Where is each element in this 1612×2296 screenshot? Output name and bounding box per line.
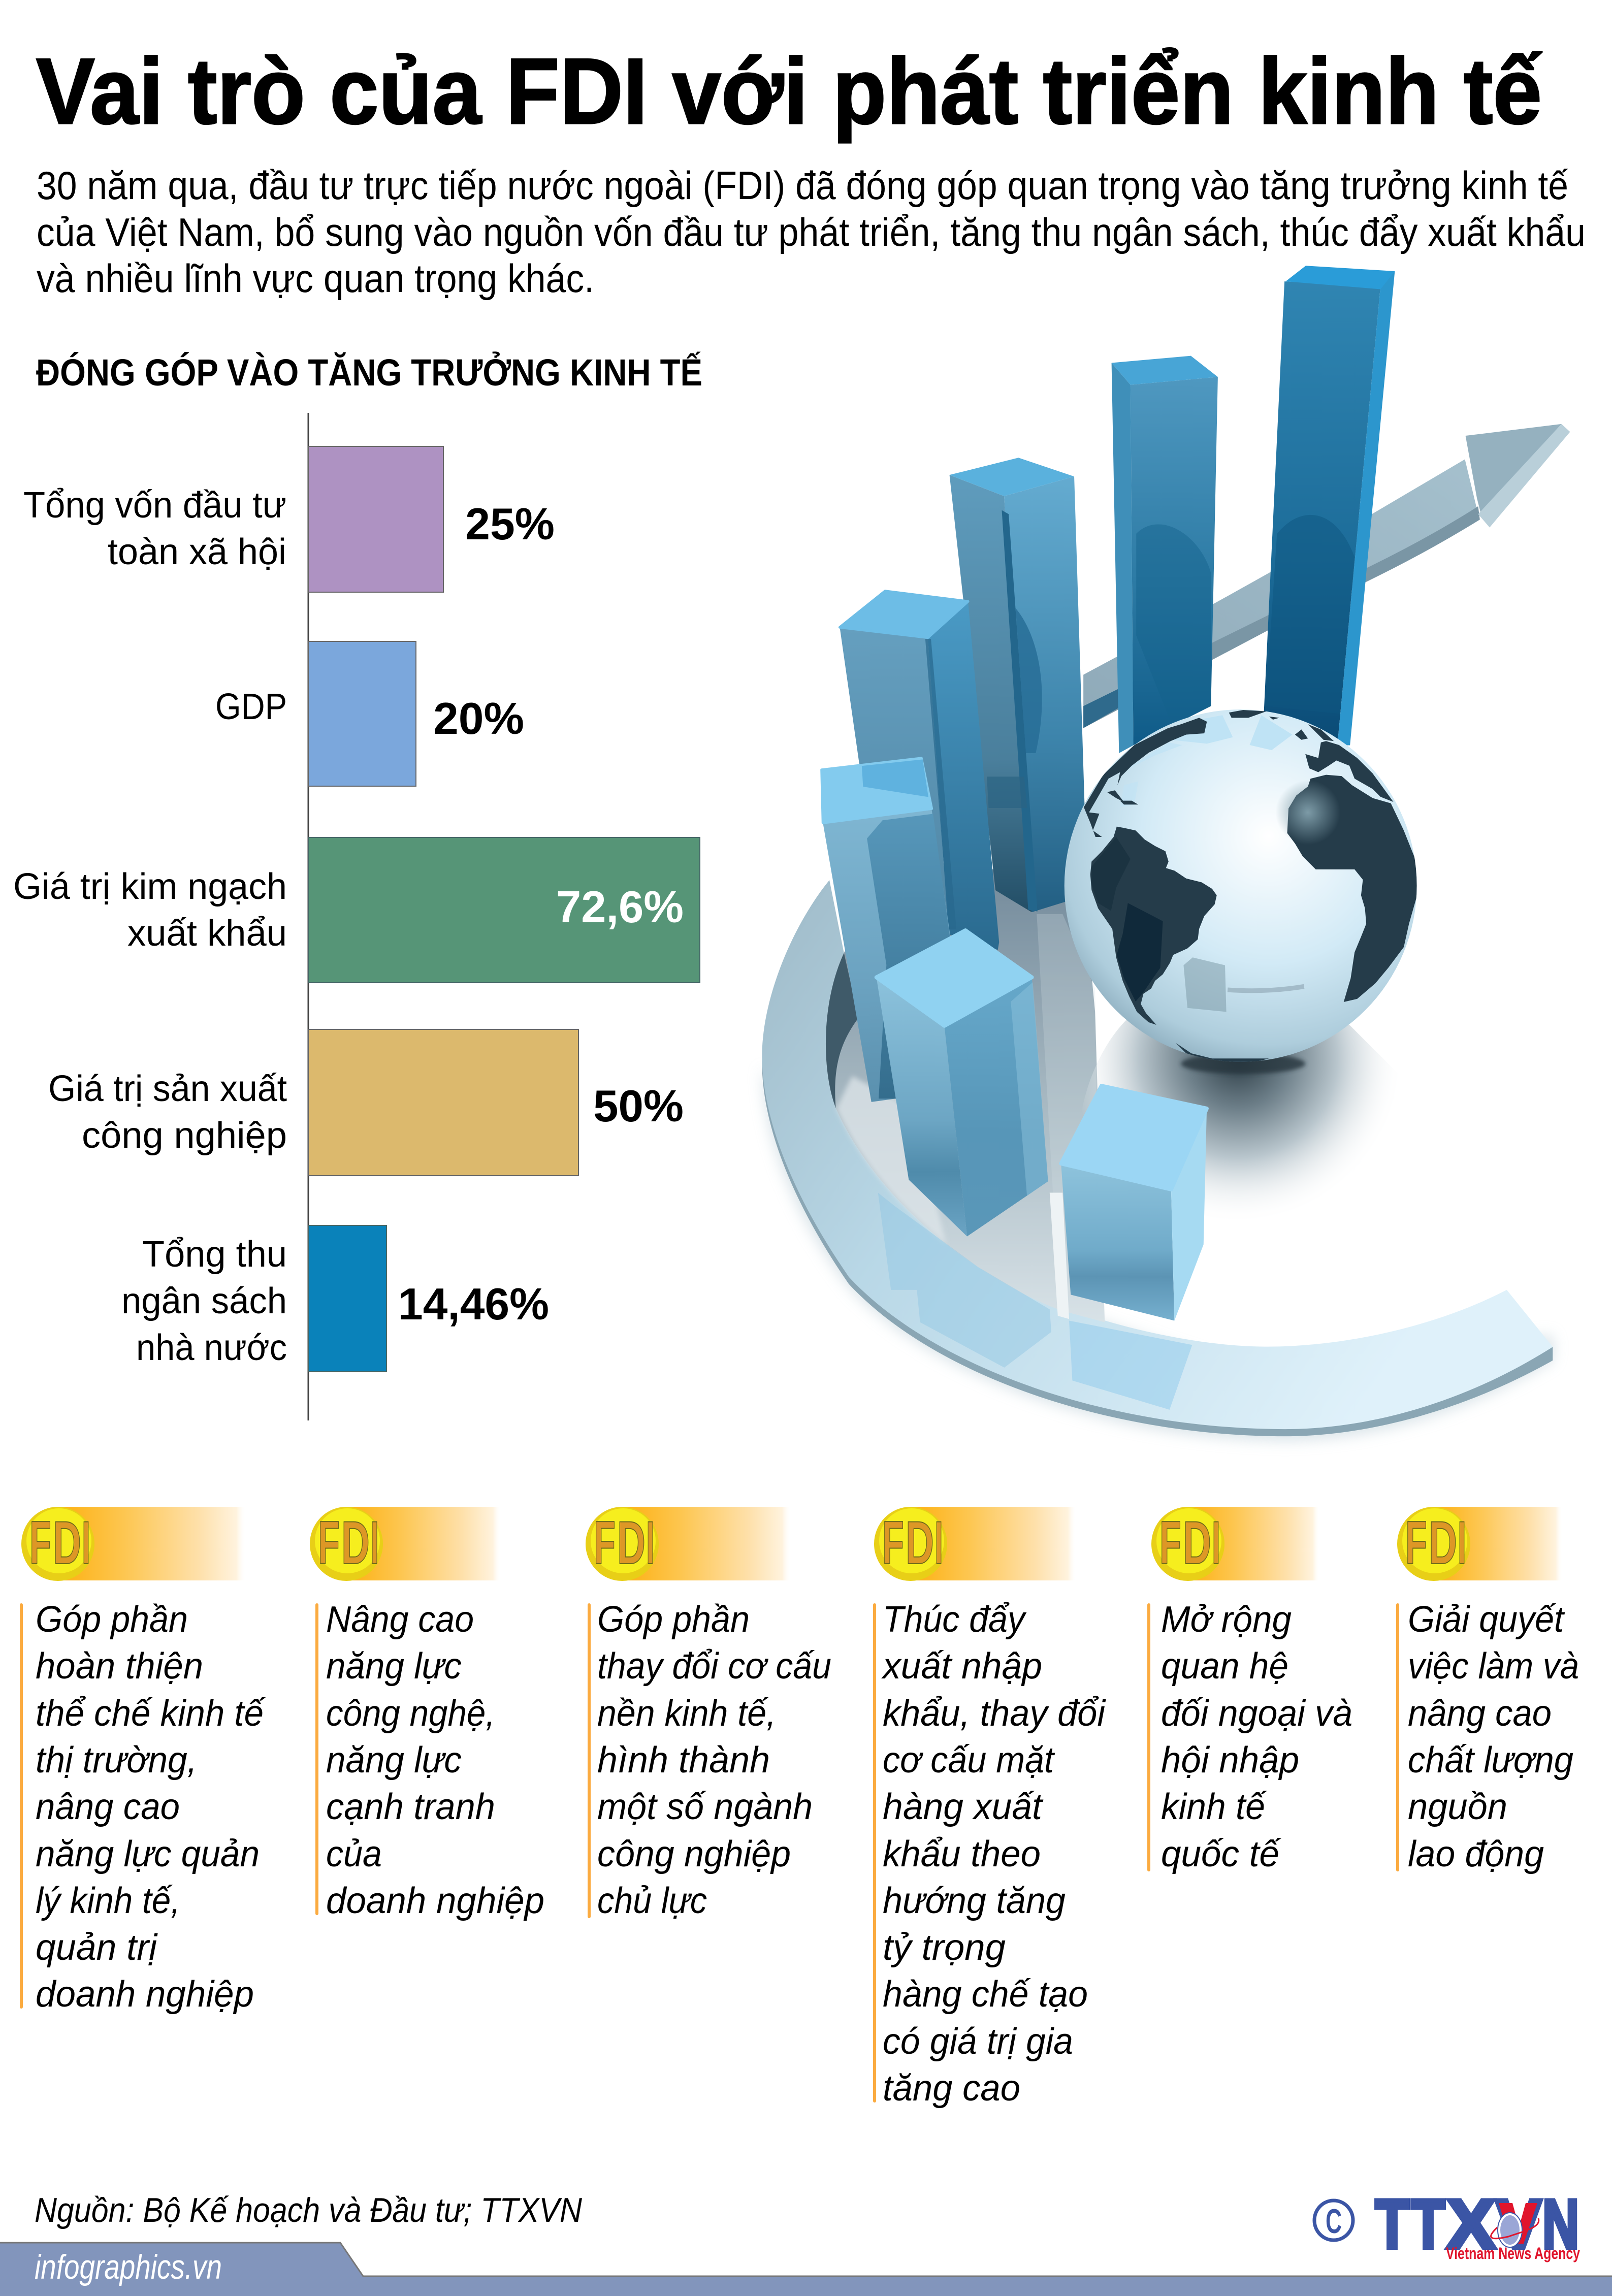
FDI column 3: hình thành: [597, 1740, 770, 1781]
bar: Tổng thu ngân sách nhà nước 14,46%: [121, 1225, 549, 1372]
logo: TTXVN: X: [1447, 2185, 1495, 2262]
bar: Tổng vốn đầu tư toàn xã hội 25%: [23, 446, 555, 592]
bar: Giá trị kim ngạch xuất khẩu 72,6%: 72,6%: [556, 882, 684, 932]
bar: Tổng thu ngân sách nhà nước 14,46%: ngân sách: [121, 1281, 287, 1321]
FDI column 2: công nghệ,: [326, 1693, 495, 1734]
bar: middle left: [840, 591, 999, 950]
FDI column 6: việc làm và: [1408, 1646, 1579, 1687]
FDI coin header: I: [1212, 1509, 1220, 1577]
logo: TTXVN: T: [1411, 2185, 1445, 2262]
FDI coin header: [874, 1507, 1076, 1581]
FDI column 1: thể chế kinh tế: [36, 1693, 266, 1734]
FDI coin header: I: [1458, 1509, 1466, 1577]
bar: Giá trị sản xuất công nghiệp 50%: [48, 1029, 684, 1176]
FDI column 6: lao động: [1408, 1834, 1544, 1874]
logo: copyright mark: C: [1326, 2202, 1342, 2241]
FDI coin header: F: [1405, 1509, 1427, 1577]
bar: Giá trị sản xuất công nghiệp 50%: công nghiệp: [82, 1115, 287, 1156]
FDI column 1: thị trường,: [36, 1740, 197, 1781]
FDI column 4: hàng chế tạo: [883, 1974, 1088, 2015]
logo: TTXVN: [1375, 2185, 1580, 2262]
FDI coin header: F: [1159, 1509, 1181, 1577]
FDI column 6: nguồn: [1408, 1787, 1507, 1827]
logo: copyright mark: [1314, 2201, 1353, 2241]
FDI coin header: D: [906, 1509, 934, 1577]
bar: Giá trị kim ngạch xuất khẩu 72,6%: [13, 837, 700, 983]
intro text block: [37, 163, 1586, 301]
logo: red V and globe: [1491, 2203, 1539, 2247]
FDI column 4: [873, 1507, 1106, 2109]
FDI coin header: [310, 1507, 501, 1581]
FDI coin header: I: [370, 1509, 379, 1577]
FDI column 2: cạnh tranh: [326, 1787, 495, 1827]
hero illustration: 3D bars and globe on a ring: [762, 266, 1570, 1440]
FDI column 5: hội nhập: [1161, 1740, 1299, 1781]
globe floor reflection and shadow: [1080, 1020, 1435, 1253]
arrow and tallest bars: [950, 266, 1570, 912]
bar: Tổng thu ngân sách nhà nước 14,46%: nhà nước: [136, 1328, 287, 1368]
FDI column 4: có giá trị gia: [883, 2021, 1073, 2062]
FDI column 3: chủ lực: [597, 1881, 707, 1921]
FDI coin header: [586, 1507, 791, 1581]
FDI coin header: [1151, 1507, 1319, 1581]
FDI column 3: một số ngành: [597, 1787, 813, 1827]
FDI column 4: tỷ trọng: [883, 1927, 1006, 1968]
FDI column 3: công nghiệp: [597, 1834, 791, 1874]
FDI column 1: năng lực quản: [36, 1834, 260, 1874]
bar: Tổng thu ngân sách nhà nước 14,46%: Tổng thu: [142, 1234, 287, 1275]
FDI column 2: năng lực: [326, 1646, 462, 1687]
FDI column 4: xuất nhập: [881, 1646, 1042, 1687]
FDI column 5: kinh tế: [1161, 1787, 1268, 1827]
FDI coin header: D: [53, 1509, 81, 1577]
FDI column 3: Góp phần: [597, 1599, 750, 1640]
FDI column 4: cơ cấu mặt: [883, 1740, 1055, 1781]
FDI column 5: đối ngoại và: [1161, 1693, 1352, 1734]
FDI coin header: F: [882, 1509, 904, 1577]
FDI column 3: nền kinh tế,: [597, 1693, 776, 1734]
bar: GDP 20%: 20%: [433, 693, 524, 743]
axis: [308, 413, 309, 1420]
bar: Tổng vốn đầu tư toàn xã hội 25%: 25%: [465, 499, 555, 549]
FDI coin header: [1397, 1507, 1562, 1581]
cube: front left: [877, 930, 1048, 1237]
FDI column 2: của: [326, 1834, 382, 1874]
bars: left group: [822, 591, 999, 1102]
bar: Tổng thu ngân sách nhà nước 14,46%: 14,46%: [398, 1279, 549, 1329]
bar: Tổng vốn đầu tư toàn xã hội 25%: toàn xã hội: [108, 532, 286, 572]
FDI coin header: I: [82, 1509, 90, 1577]
arrow: [1083, 424, 1570, 728]
FDI column 3: thay đổi cơ cấu: [597, 1646, 831, 1687]
FDI column 4: khẩu theo: [883, 1834, 1041, 1874]
FDI column 5: [1147, 1507, 1352, 1874]
bar chart: [13, 413, 700, 1420]
FDI coin header: D: [617, 1509, 646, 1577]
continents: [1084, 710, 1420, 1063]
FDI column 4: Thúc đẩy: [883, 1599, 1027, 1640]
intro text block: và nhiều lĩnh vực quan trọng khác.: [37, 256, 594, 301]
chart heading: ĐÓNG GÓP VÀO TĂNG TRƯỞNG KINH TẾ: [36, 351, 702, 394]
bar: front left: [822, 758, 951, 1102]
FDI column 6: nâng cao: [1408, 1693, 1552, 1734]
source note: Nguồn: Bộ Kế hoạch và Đầu tư; TTXVN: [35, 2191, 583, 2229]
FDI column 6: Giải quyết: [1408, 1599, 1565, 1640]
FDI column 1: hoàn thiện: [36, 1646, 203, 1687]
FDI column 2: doanh nghiệp: [326, 1881, 544, 1921]
footer band: [0, 2243, 1612, 2296]
bar: GDP 20%: [215, 641, 524, 786]
FDI column 1: [20, 1507, 266, 2015]
logo: TTXVN: N: [1542, 2185, 1579, 2262]
bar: Giá trị sản xuất công nghiệp 50%: 50%: [593, 1081, 684, 1131]
globe reflections: [1120, 715, 1293, 807]
FDI column 4: tăng cao: [883, 2068, 1020, 2109]
ring plate and floor: [762, 862, 1553, 1440]
FDI column 4: khẩu, thay đổi: [883, 1693, 1106, 1734]
bar: Tổng vốn đầu tư toàn xã hội 25%: Tổng vốn đầu tư: [23, 485, 286, 526]
title: Vai trò của FDI với phát triển kinh tế: [36, 39, 1542, 143]
logo: TTXVN: T: [1375, 2185, 1409, 2262]
FDI column 1: lý kinh tế,: [36, 1881, 180, 1921]
bar: middle back: [950, 458, 1087, 912]
FDI coin header: I: [646, 1509, 655, 1577]
FDI column 2: năng lực: [326, 1740, 462, 1781]
FDI column 3: [586, 1507, 831, 1921]
FDI coin header: D: [341, 1509, 370, 1577]
FDI column 4: hướng tăng: [883, 1881, 1066, 1921]
globe: [1065, 709, 1420, 1063]
FDI column 5: quan hệ: [1161, 1646, 1288, 1687]
FDI coin header: D: [1183, 1509, 1211, 1577]
bar: GDP 20%: GDP: [215, 687, 287, 727]
footer band: infographics.vn: [35, 2248, 222, 2286]
logo: TTXVN: V: [1496, 2185, 1541, 2262]
FDI coin header: F: [594, 1509, 616, 1577]
FDI coin header: [21, 1507, 246, 1581]
cube: front right: [1061, 1086, 1207, 1320]
FDI coin header: I: [934, 1509, 943, 1577]
FDI column 1: nâng cao: [36, 1787, 180, 1827]
bar: Giá trị kim ngạch xuất khẩu 72,6%: xuất khẩu: [127, 913, 287, 954]
cubes in front: [877, 930, 1207, 1320]
FDI column 5: Mở rộng: [1161, 1599, 1292, 1640]
FDI column 1: quản trị: [36, 1927, 158, 1968]
FDI column 1: doanh nghiệp: [36, 1974, 254, 2015]
FDI column 6: chất lượng: [1408, 1740, 1573, 1781]
bar: second tallest: [1112, 356, 1218, 753]
FDI coin header: F: [29, 1509, 51, 1577]
bar: Giá trị sản xuất công nghiệp 50%: Giá trị sản xuất: [48, 1069, 287, 1109]
bar: Giá trị kim ngạch xuất khẩu 72,6%: Giá trị kim ngạch: [13, 866, 287, 907]
bar: tallest: [1264, 266, 1395, 746]
FDI coin header: F: [318, 1509, 340, 1577]
FDI coin header: D: [1429, 1509, 1457, 1577]
FDI column 4: hàng xuất: [883, 1787, 1044, 1827]
FDI column 6: [1396, 1507, 1579, 1874]
FDI column 2: Nâng cao: [326, 1599, 474, 1640]
FDI column 2: [310, 1507, 544, 1921]
FDI column 1: Góp phần: [36, 1599, 188, 1640]
reflected cube on globe: [1183, 957, 1227, 1012]
FDI column 5: quốc tế: [1161, 1834, 1282, 1874]
